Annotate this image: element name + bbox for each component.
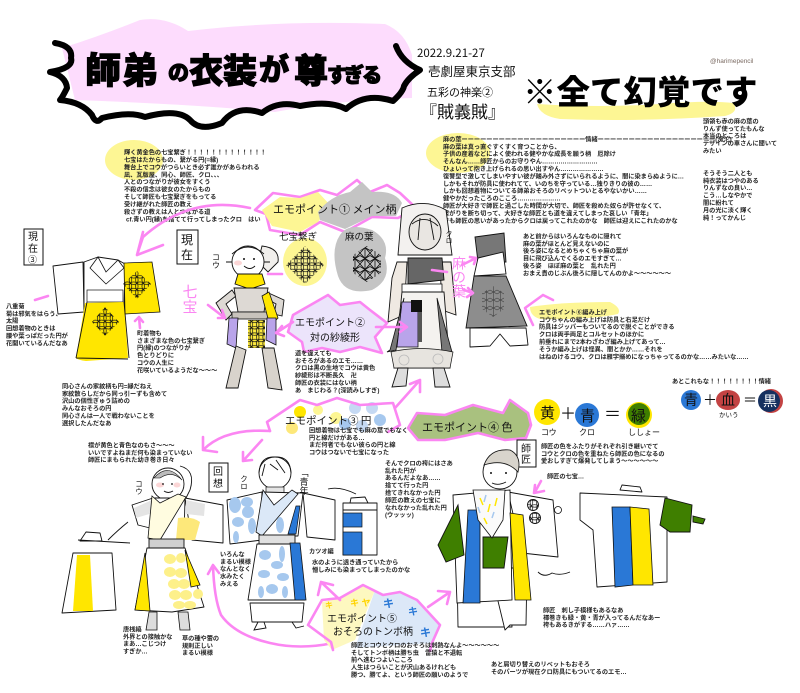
note: doshin crest: みんなおそろの円 (62, 405, 112, 413)
note: emo 3: コウはつないで七宝になった (309, 449, 389, 457)
extra note heading: あとこれもな！！！！！！！！情緒 (672, 377, 771, 385)
note: leader's hemp: デザインの車さんに聞いて (703, 140, 777, 148)
emo point 2 badge: エモポイント② (295, 314, 365, 329)
note: doshin crest: 選択したんだなあ (62, 419, 112, 427)
emo point 2 badge (288, 295, 387, 353)
note: town kimono: 円(縁)のつながりが (137, 344, 191, 352)
title text: の (168, 62, 189, 85)
emo point 5 badge: キ (420, 627, 431, 639)
emo point 2 badge: 対の紗綾形 (310, 329, 360, 344)
name label seinen: 「青年 (298, 468, 310, 496)
note: emo 5: 前へ進むつよいこころ (351, 656, 413, 664)
back coat sketch (580, 485, 705, 587)
title banner (50, 19, 420, 127)
note: hemp leaf: 師匠が大好きで師匠と過ごした時間が大切で、師匠を殺めた奴らが許せなくて、 (443, 202, 665, 210)
event info: 2022.9.21-27 (417, 45, 485, 61)
note: emo 3: 回想着物は七宝でも麻の葉でもなく (309, 426, 408, 434)
note: hemp leaf: 健やかだったころのこころ………………… (443, 195, 561, 203)
note: back view hemp: 後ろ姿になるとめちゃくちゃ麻の葉が (523, 247, 629, 255)
note: gold shippo: 殺さずの教えは人とつながる道 (124, 208, 211, 216)
note: hemp leaf: 繋がりを断ち切って、大好きな師匠とも道を違えてしまった哀しい「青年」 (443, 209, 652, 217)
note: rinzu: 純衣装はつやのある (703, 177, 759, 185)
formula: blue plus blood equals black (681, 389, 783, 419)
title text: 装 (223, 53, 257, 91)
formula: blue plus blood equals black: 血 (721, 390, 735, 410)
note: back view hemp: 目に飛び込んでくるのエモすぎて… (523, 255, 622, 263)
note: emo 5: そしてトンボ柄は勝ち虫 雷猿と不退転 (351, 649, 463, 657)
formula: blue plus blood equals black: 青 (684, 390, 698, 410)
note: rinzu: そうそう二人とも (703, 169, 752, 177)
emo point 5 badge: キ (325, 601, 333, 610)
label: shippo pink (180, 284, 225, 318)
note: town kimono: さまざまな色の七宝繋ぎ (137, 337, 205, 345)
note: collar colours: 師匠にまもられた幼き巻き日々 (88, 456, 175, 464)
note: town kimono: 色とりどりに (137, 352, 174, 360)
note: yaegiku: 菊は邪気をはらう、 (6, 310, 62, 318)
long arrow from emo point 5 (208, 565, 333, 646)
note: emo 2: 師匠の衣装にはない柄 (295, 379, 357, 387)
emo point 5 badge: キ ヤ (350, 598, 371, 608)
title text: ぎ (344, 63, 364, 87)
note: hemp leaf: でも師匠の思いがあったからクロは戻ってこれたのかな 師匠は迎えにこれたのかな (443, 217, 678, 225)
formula: blue plus blood equals black: ＝ (743, 390, 757, 410)
note: yaegiku: 腰や葉っぱだった円が (6, 332, 69, 340)
note: Kuro's hakama: 捨てて行った円 (385, 482, 428, 490)
formula: yellow plus blue equals green: コウ (541, 427, 557, 438)
formula: blue plus blood equals black: 黒 (763, 391, 777, 411)
formula: yellow plus blue equals green: ししょー (628, 427, 660, 438)
note: gold shippo: 人とのつながりが彼女をすくう (124, 178, 210, 186)
note: hemp leaf: しかもそれが防具に使われてて、いのちを守っている…独りきりの彼の…… (443, 180, 652, 188)
shippo pattern swatch: 七宝繋ぎ (279, 229, 318, 243)
headline: all illusions: ※全て幻覚です (523, 75, 758, 112)
title text: 弟 (122, 50, 158, 91)
note: emo 2: クロは黒の生地でコウは黄色 (295, 364, 375, 372)
note: rinzu: りんずなの良い… (703, 184, 752, 192)
label: present 3: ③ (28, 253, 37, 266)
note: gold shippo: 受け継がれた師匠の教え (124, 201, 192, 209)
name label young Kuro: クロ (238, 475, 250, 490)
Kou present figure (210, 246, 284, 390)
note: emo 5: 人生はつらいことが沢山あるけれども (351, 664, 456, 672)
event info (417, 45, 516, 123)
separate skirt sketch (62, 522, 130, 613)
note: doshin crest: 沢山の個性ぎゅう詰めの (62, 397, 130, 405)
note: gold shippo: 舞台上でコウがつらいとき必ず誰かがあらわれる (124, 163, 260, 171)
note: hemp leaf: 子供の産着などによく使われる健やかな成長を願う柄 厄除け (443, 150, 616, 158)
emo point 6 note: コウちゃんの編み上げは防具と右足だけ (539, 316, 650, 324)
note: doshin crest: 同心さんの家紋柄も円=縁だねえ (62, 382, 152, 390)
note: hemp leaf: 復讐型で激してしまいやすい彼が踏み外さずにいられるように、闇に染まらぬように… (443, 172, 684, 180)
emo point 6 note: エモポイント⑥編み上げ (539, 308, 608, 316)
emo point 5 badge: おそろのトンボ柄 (333, 623, 413, 638)
note: hemp leaf: そんなん……師匠からのお守りやん……………………… (443, 158, 598, 166)
note: collar colours: 襟が黄色と青色なのもさ〜〜〜 (88, 441, 175, 449)
note: tozan stripe: まあ…こじつけ (123, 641, 166, 648)
note: Kuro's hakama: そんでクロの袴にはさあ (385, 459, 453, 467)
note: Kuro's hakama: なれなかった乱れた円 (385, 504, 447, 512)
note: seeds: まるい模様 (182, 649, 214, 657)
note: Kuro's hakama: 乱れた円が (385, 467, 417, 475)
shippo pattern swatch (279, 229, 327, 286)
young Kou figure (132, 466, 223, 630)
label: present 3 (24, 228, 43, 266)
arrows from emo point 3 (203, 380, 420, 461)
note: Kuro's hakama: 捨てきれなかった円 (385, 489, 441, 497)
label: recollection (209, 463, 228, 492)
note: tozan stripe: 外界との接触かな (123, 633, 172, 641)
note: tozan stripe: 唐桟縞 (123, 625, 142, 633)
note: collar colours: いいですよねまだ何も染まっていない (88, 449, 192, 457)
formula: yellow plus blue equals green: クロ (579, 427, 595, 438)
emo point 3 badge (267, 398, 400, 436)
note: Kuro's hakama: (ウッッッ) (385, 511, 414, 519)
note: leader's hemp: みたい (703, 147, 722, 155)
emo point 5 badge (308, 582, 450, 651)
note: master's shippo: 師匠の七宝… (547, 472, 584, 480)
note: hemp leaf (426, 133, 732, 225)
formula: blue plus blood equals black: ＋ (703, 390, 717, 410)
note: like water: 水のように透き通っていたから (312, 558, 398, 566)
emo point 6 note: クロは両手両足とコルセットのほかに (539, 331, 644, 339)
label: hemp leaf pink (432, 256, 476, 298)
note: gold shippo (105, 140, 266, 223)
note: colours inherited: 師匠の色をふたりがそれぞれ引き継いでて (541, 442, 658, 450)
note: emo 5: 勝つ、勝てよ、という師匠の願いのようで (351, 671, 468, 679)
label: present: 現 (181, 231, 193, 248)
Kuro present figure (387, 203, 456, 387)
note: round patterns: なんとなく (220, 565, 251, 573)
emo point 6 note: 前垂れにまで2本わざわざ編み上げてあって… (539, 338, 666, 346)
title text: る (362, 65, 382, 87)
emo point 5 badge: キ (383, 598, 394, 610)
note: gold shippo: cf.青い円(縁)を捨てて行ってしまったクロ はい (126, 215, 261, 223)
label: present 3: 現 (28, 228, 38, 243)
note: leader's hemp: 本当のところは (703, 132, 746, 140)
note: town kimono: 花咲いているようだな〜〜〜 (137, 366, 217, 374)
title text: 尊 (294, 53, 328, 91)
label: recollection: 想 (213, 475, 223, 490)
note: town kimono: 町着物も (137, 329, 162, 337)
formula: yellow plus blue equals green: ＋ (560, 400, 576, 424)
name label Kuro: クロ (444, 230, 454, 244)
note: colours inherited: 愛おしすぎて爆発してしまう〜〜〜〜〜〜 (541, 457, 658, 465)
note: gold shippo: 輝く黄金色の七宝繋ぎ！！！！！！！！！！！！！ (124, 148, 266, 156)
note: rivets: そのパーツが現在クロ防具にもついてるのエモ… (491, 668, 627, 676)
master figure (438, 450, 570, 630)
formula: yellow plus blue equals green: 青 (580, 405, 595, 426)
note: seeds: 規則正しい (182, 642, 213, 650)
note: back view hemp: おまえ貴のじぶん後ろに隠してんのかよ〜〜〜〜〜〜 (523, 269, 671, 277)
note: hemp leaf: しかも回想着物についてる師弟おそろのリベットついとるやないかい…… (443, 187, 647, 195)
young Kuro figure (227, 457, 335, 630)
label: master (517, 440, 536, 467)
label: present: 在 (181, 246, 193, 263)
hemp leaf pattern swatch: 麻の葉 (345, 229, 374, 243)
formula: yellow plus blue equals green: ＝ (604, 400, 621, 425)
formula: yellow plus blue equals green: 緑 (631, 405, 646, 426)
note: back view hemp: 後ろ姿 ほぼ麻の葉と 乱れた円 (523, 262, 616, 270)
name label young Kou: コウ (134, 480, 144, 495)
emo point 4 badge: エモポイント④ 色 (422, 419, 512, 435)
event info: 『賊義賊』 (420, 98, 505, 123)
note: emo 5: 師匠とコウとクロのおそろは刺熱なんよ〜〜〜〜〜〜 (351, 641, 499, 649)
emo point 5 badge: エモポイント⑤ (327, 610, 397, 625)
note: emo 3: まだ何者でもない彼らの円と線 (309, 441, 396, 449)
note: leader's hemp: 頭領も赤の麻の葉の (703, 117, 759, 125)
note: hemp leaf: ひょいって抱き上げられるの思い出すやん………………… (443, 165, 604, 173)
label: master: 匠 (521, 451, 531, 466)
emo point 1 badge: エモポイント① メイン柄 (273, 201, 396, 217)
back view dress (466, 233, 528, 347)
note: gold shippo: 凪、瓦版屋、同心、師匠、クロ、、、 (124, 171, 223, 179)
note: rinzu: こう…しなやかで (703, 192, 752, 200)
note: sashiko: 褌巻きも緑・黄・青が入ってるんだなあー (543, 614, 660, 622)
credit handle: @harimepencil (710, 58, 754, 65)
note: round patterns: まるい模様 (220, 558, 252, 566)
emo point 1 badge (255, 180, 416, 235)
label: present 3: 在 (28, 240, 38, 255)
emo point 6 note: はねのけるコウ、クロは雁字搦めになっちゃってるのかな……みたいな…… (539, 353, 749, 361)
hemp leaf pattern swatch (334, 227, 387, 291)
formula: yellow plus blue equals green (534, 399, 660, 438)
note: emo 2: 道を違えても (295, 349, 332, 357)
note: Kuro's hakama: 師匠の教えの七宝に (385, 496, 441, 504)
note: back view hemp: あと前からはいろんなものに隠れて (523, 232, 622, 240)
note: yaegiku: 花開いているんだなあ (6, 339, 68, 347)
note: back view hemp: 麻の葉がほとんど見えないのに (523, 240, 609, 248)
emo point 3 badge: エモポイント③ 円 (285, 413, 371, 428)
label: shippo pink: 七宝 (180, 284, 200, 314)
name label Kou: コウ (210, 253, 222, 269)
note: hemp leaf: 麻の葉は真っ直ぐすくすく育つことから、 (443, 143, 561, 151)
note: yaegiku: 回想着物のときは (6, 325, 56, 333)
note: emo 3: 円と線だけがある… (309, 434, 365, 442)
label: recollection: 回 (213, 463, 223, 478)
note: emo 2: おそろがあるのエモ…… (295, 357, 363, 365)
note: seeds: 草の種や蕾の (182, 634, 219, 642)
title text: が (259, 53, 289, 87)
note: doshin crest: 同心さんは一人で戦わないことを (62, 412, 155, 420)
note: yaegiku: 太陽 (6, 317, 18, 325)
event info: 壱劇屋東京支部 (428, 61, 516, 80)
note: rinzu: 月の光に淡く輝く (703, 206, 752, 214)
note: hemp leaf: 麻の葉ーーーーーーーーーーーーーーーーーーーー情緒ーーーーーーーーーーーーーーーーーーー(滂沱) (443, 135, 732, 143)
event info: 五彩の神楽② (427, 84, 493, 100)
note: gold shippo: 不殺の信念は彼女のたからもの (124, 186, 211, 194)
note: tozan stripe: すぎか… (123, 648, 148, 656)
note: round patterns: 水みたく (220, 573, 245, 581)
emo point 5 badge: キ (408, 607, 418, 618)
note: emo 2: あ まじわる？(深読みしすぎ) (295, 386, 379, 394)
title text: 師 (85, 50, 121, 91)
emo point 6 note: そうか編み上げは怪異、闇とかか……それを (539, 345, 663, 353)
note: rinzu: 純！ってかんじ (703, 214, 746, 222)
emo point 4 badge (408, 400, 531, 440)
note: gold shippo: そして師匠も七宝繋ぎをもってる (124, 193, 216, 201)
emo point 6 note: 防具はジッパーもついてるので脱ぐことができる (539, 323, 675, 331)
note: yaegiku: 八重菊 (6, 302, 25, 310)
note: rinzu: 闇に紛れて (703, 199, 734, 207)
note: sashiko: 袴もあるきがする……ハァ…… (543, 621, 630, 629)
Katsuo edition sketch (328, 488, 377, 555)
note: round patterns: みえる (220, 580, 238, 588)
arrows from emo point 1 (35, 205, 282, 328)
title text: す (327, 64, 347, 87)
note: sashiko: 師匠 刺し子模様もあるなあ (543, 606, 623, 614)
note: round patterns: いろんな (220, 550, 245, 558)
emo point 6 note (525, 295, 749, 361)
note: like water: 憎しみにも染まってしまったのかな (312, 566, 410, 574)
note: gold shippo: 七宝はたからもの、繋がる円(=縁) (124, 156, 218, 164)
note: town kimono: コウの人生に (137, 359, 174, 367)
town kimono figure (53, 257, 160, 361)
title text: 衣 (189, 53, 223, 91)
label: hemp leaf pink: 麻の葉 (449, 256, 469, 298)
label: present (177, 230, 198, 264)
note: rivets: あと肩切り替えのリベットもおそろ (491, 660, 590, 668)
note: Kuro's hakama: あるんだよなあ…… (385, 474, 441, 482)
note: colours inherited: コウとクロの色を重ねたら師匠の色になるの (541, 450, 665, 458)
note: emo 2: 紗綾形は不断長久 卍 (295, 372, 357, 380)
note: leader's hemp: りんず使ってたもんな (703, 125, 765, 133)
arrows from emo point 2 (276, 322, 407, 336)
note: doshin crest: 家紋散らしだから同っ引ーずも含めて (62, 390, 167, 398)
formula: yellow plus blue equals green: 黄 (540, 402, 555, 423)
label: Katsuo: カツオ編 (309, 547, 334, 555)
label: master: 師 (521, 440, 531, 455)
formula: blue plus blood equals black: かいう (719, 409, 738, 419)
